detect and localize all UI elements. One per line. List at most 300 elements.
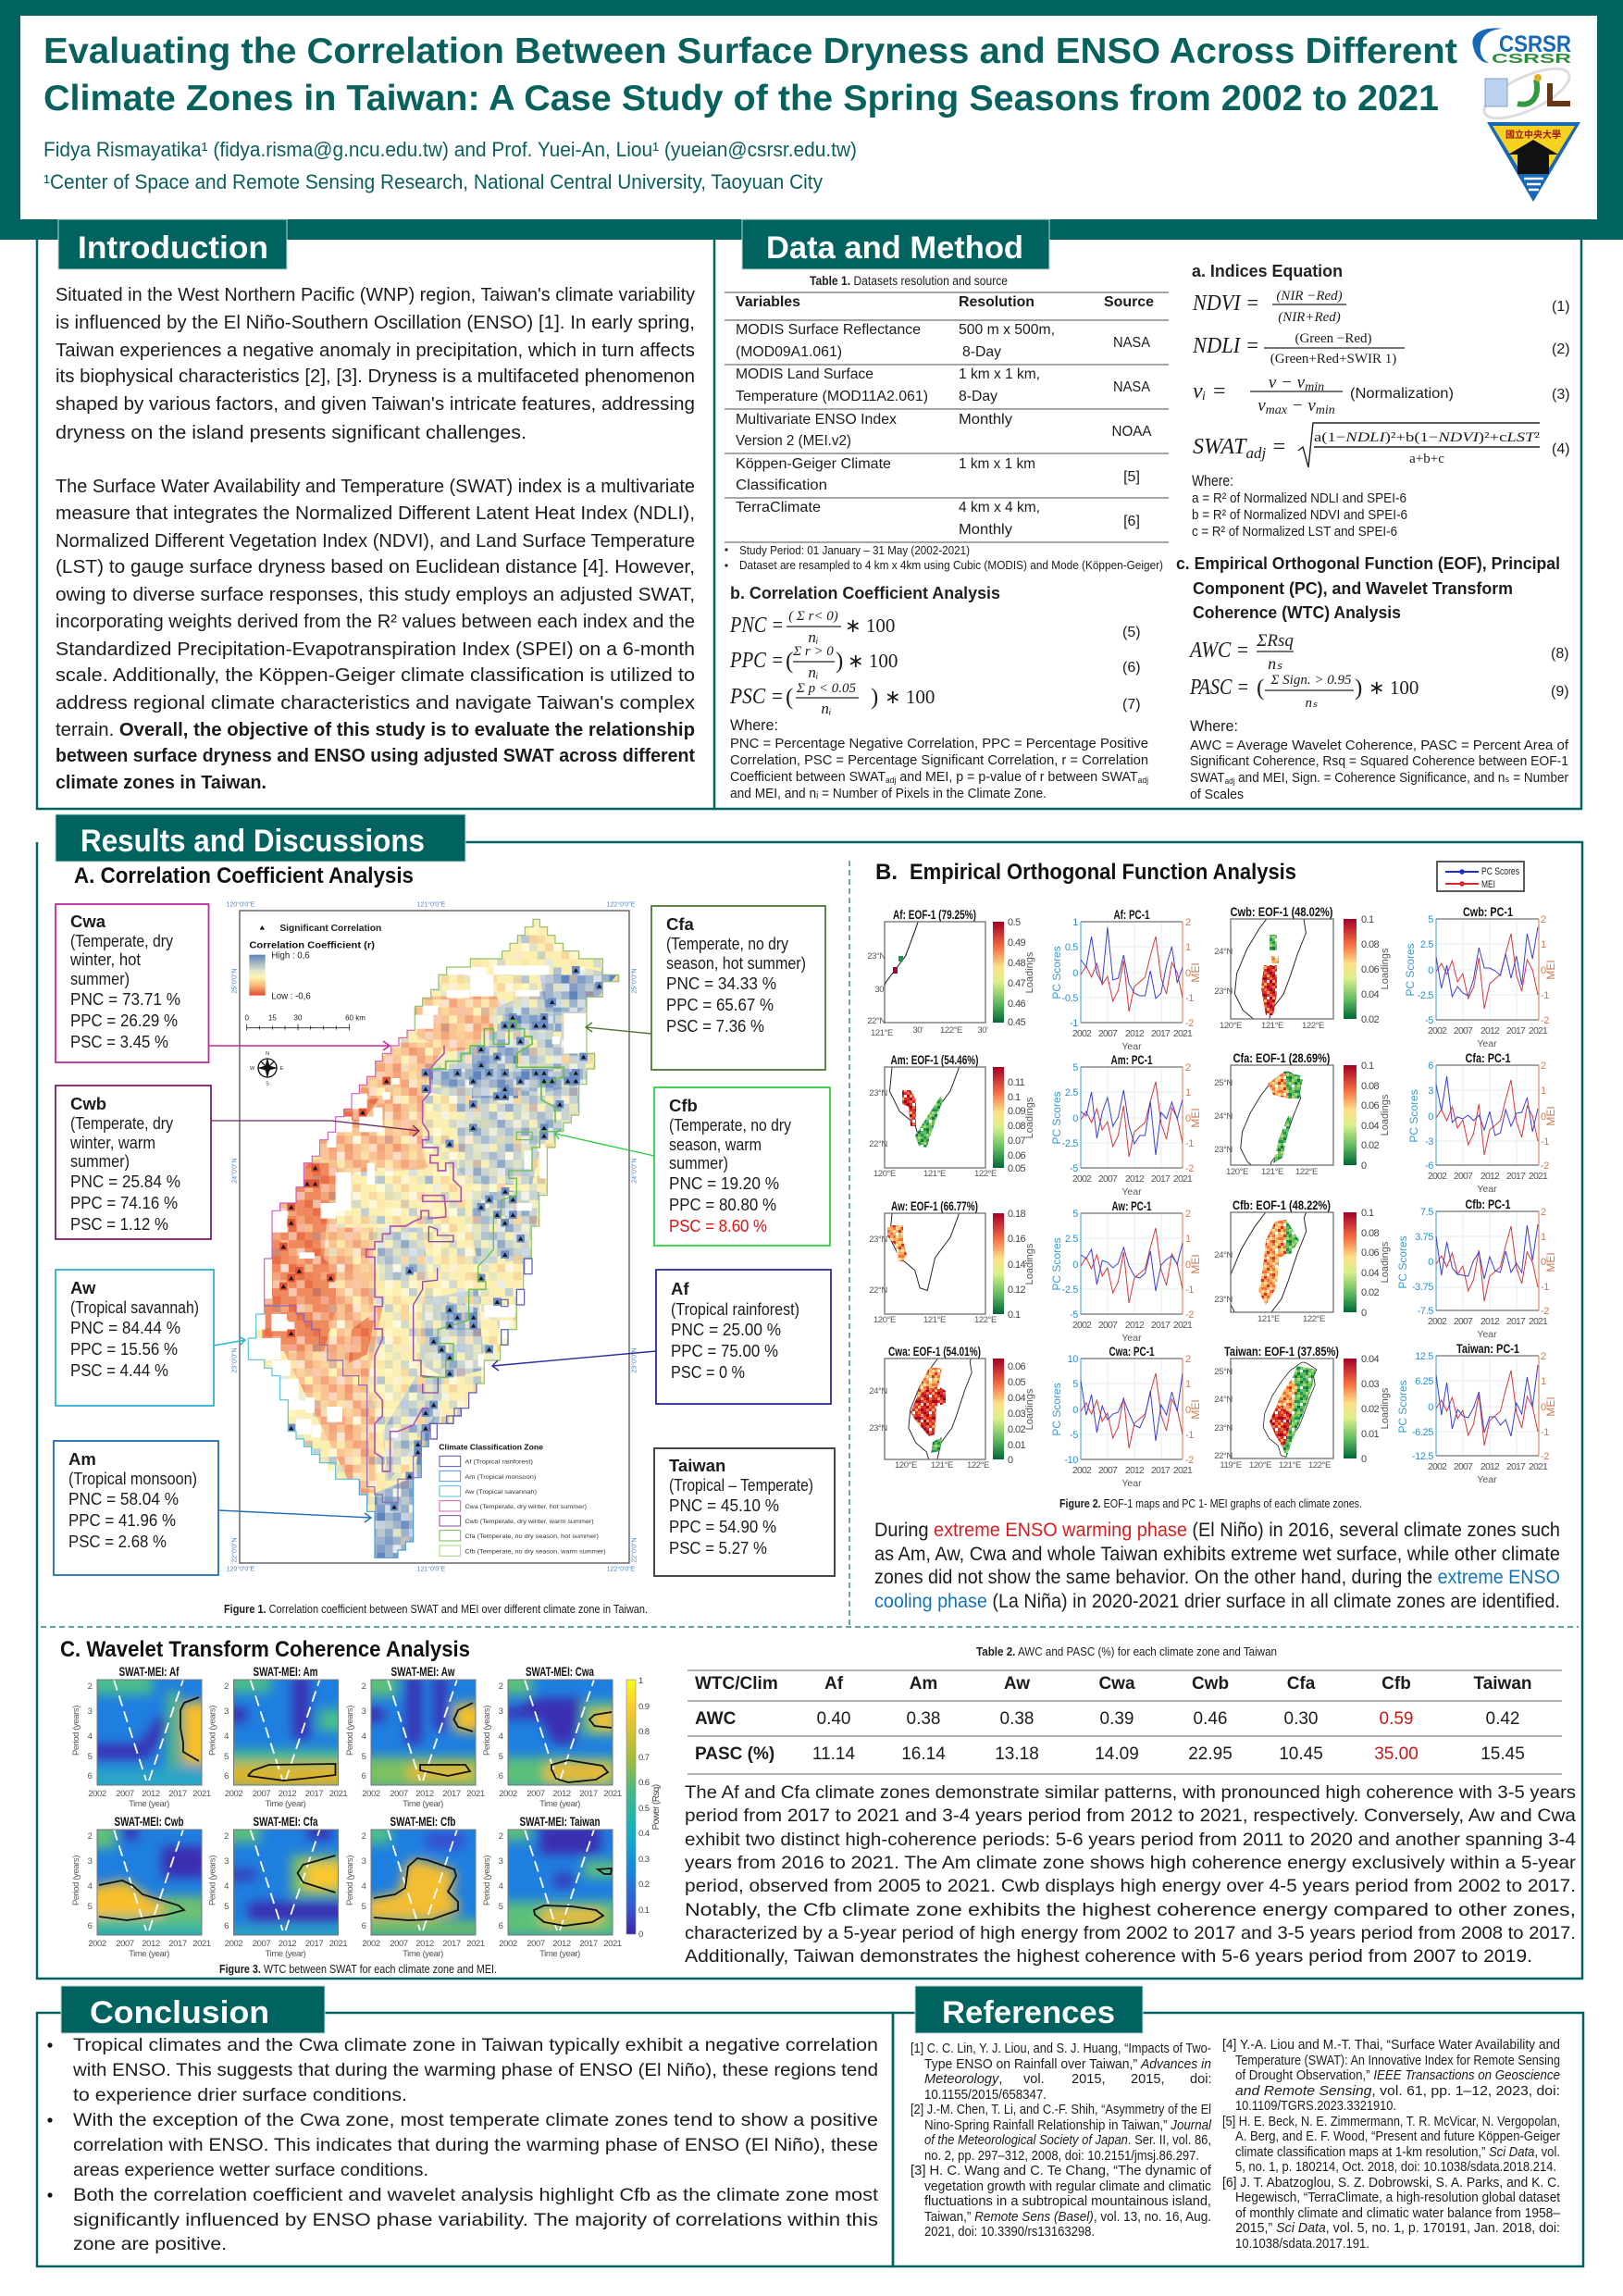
EOF map: Cwa: 0.01 <box>1008 1440 1025 1451</box>
callout: Cwb: winter, warm <box>69 1134 155 1152</box>
where block left: adj <box>886 776 896 785</box>
EOF map: Cfa: 24°N <box>1214 1111 1233 1122</box>
table 2: 0.38 <box>1000 1709 1034 1729</box>
PC chart: Taiwan: 2021 <box>1529 1461 1548 1472</box>
equation 9 <box>1189 673 1569 711</box>
PC chart: Af: 2021 <box>1173 1028 1193 1039</box>
EOF map: Taiwan <box>1214 1344 1391 1471</box>
PC chart: Am: 5 <box>1072 1062 1078 1074</box>
heading: Introduction: Introduction <box>78 230 268 266</box>
WTC panel: Aw <box>345 1664 487 1809</box>
where block left: Where: <box>730 716 778 734</box>
EOF map: Cfb: 24°N <box>1214 1250 1233 1260</box>
EOF map: Cfb: 23°N <box>1214 1295 1233 1305</box>
equation 4: (4) <box>1552 441 1570 457</box>
climate zone legend: Climate Classification Zone <box>439 1443 543 1452</box>
PC chart: Cwa: 2002 <box>1072 1465 1092 1476</box>
PC chart: Cfa: 2007 <box>1454 1171 1473 1182</box>
WTC panel: Taiwan: 4 <box>499 1881 503 1892</box>
map graticule labels: 24°0'0"N <box>230 1158 238 1184</box>
PC chart: Cwa: 2007 <box>1098 1465 1118 1476</box>
references column 1: of the Meteorological Society of Japan. Ser. II, vol. 86, <box>924 2133 1211 2148</box>
callout: Taiwan: Taiwan <box>669 1456 725 1475</box>
WTC panel: Cfa: 2002 <box>225 1939 242 1949</box>
PC chart: Taiwan: 1 <box>1541 1376 1546 1387</box>
references column 1: doi: <box>1190 2072 1212 2087</box>
PC chart: Cfa: 0 <box>1428 1111 1433 1123</box>
introduction text: The Surface Water Availability and Temperature (SWAT) index is a multivariate <box>56 476 695 497</box>
PC chart: Taiwan <box>1396 1341 1557 1485</box>
equation 3: min <box>1316 403 1335 417</box>
map graticule labels: 22°0'0"N <box>630 1537 638 1563</box>
icon: compass: S <box>266 1082 269 1087</box>
table 1: Version 2 (MEI.v2) <box>736 433 851 449</box>
equation 2: (2) <box>1552 341 1570 357</box>
PC chart: Am: PC Scores <box>1050 1091 1063 1145</box>
EOF map: Cwb: 23°N <box>1214 987 1233 997</box>
callout: Cfb: PPC = 80.80 % <box>669 1196 776 1214</box>
panel: results and discussions <box>37 802 1582 1979</box>
references column 1: fluctuations in a subtropical mountainous island, <box>924 2194 1211 2209</box>
conclusion bullets: with ENSO. This suggests that during the warming phase of ENSO (El Niño), these regions tend <box>72 2060 878 2080</box>
table 1: MODIS Land Surface <box>736 366 873 382</box>
WTC panel: Cwa: 2 <box>499 1682 503 1692</box>
ENSO paragraph <box>874 1520 1560 1612</box>
climate zone legend: Cwa (Temperate, dry winter, hot summer) <box>465 1504 587 1510</box>
callout: Af: PSC = 0 % <box>671 1363 745 1382</box>
WTC panel: Af: SWAT-MEI: Af <box>118 1664 180 1679</box>
EOF map: Af: 0.45 <box>1008 1017 1025 1028</box>
heading: Data and Method: Data and Method <box>766 230 1023 266</box>
callout: Am: PSC = 2.68 % <box>68 1533 167 1551</box>
EOF map: Af <box>825 802 1035 1038</box>
PC chart: Cwa: 1 <box>1185 1379 1191 1390</box>
callout: Cwa: PSC = 3.45 % <box>70 1033 168 1051</box>
WTC panel: Am: Time (year) <box>266 1799 306 1809</box>
PC chart: Cwa: 5 <box>1072 1379 1078 1390</box>
EOF map: Af: 0.48 <box>1008 958 1025 969</box>
climate zone legend: Aw (Tropical savannah) <box>465 1489 537 1496</box>
arrow: Cfb <box>555 1129 654 1156</box>
PC chart: Aw: -2.5 <box>1062 1285 1078 1296</box>
references column 2: [4] Y.-A. Liou and M.-T. Thai, “Surface Water Availability and <box>1222 2038 1560 2053</box>
PC chart: Cfa <box>1407 1050 1557 1195</box>
PC chart: Aw: 2017 <box>1151 1320 1171 1331</box>
WTC panel: Cfb: 2 <box>362 1831 366 1842</box>
where block left: adj <box>1138 776 1148 785</box>
conclusion bullets: With the exception of the Cwa zone, most temperate climate zones tend to show a positive <box>73 2110 878 2130</box>
EOF map: Cwb: 0.06 <box>1361 964 1379 975</box>
EOF map: Taiwan: 0.01 <box>1361 1429 1379 1440</box>
WTC panel: Taiwan: 2 <box>499 1831 503 1842</box>
logo: CSRSR <box>1472 28 1571 67</box>
conclusion bullets: correlation with ENSO. This indicates that during the warming phase of ENSO (El Niño), these <box>73 2135 878 2155</box>
WTC panel: Am: 6 <box>224 1771 229 1781</box>
callout: Cwa: winter, hot <box>69 950 141 969</box>
references column 2: [5] H. E. Beck, N. E. Zimmermann, T. R. McVicar, N. Vergopolan, <box>1222 2115 1560 2129</box>
PC chart: Cwb: 2007 <box>1454 1025 1473 1036</box>
table 2: Taiwan <box>1473 1674 1532 1694</box>
equation 4: adj <box>1245 444 1266 462</box>
callout: Cfb <box>654 1087 830 1246</box>
PC chart: Af: 2017 <box>1151 1028 1171 1039</box>
PC chart: Cfb: Cfb: PC-1 <box>1466 1197 1511 1211</box>
EOF map: Taiwan: Loadings <box>1380 1387 1391 1429</box>
ENSO paragraph: cooling phase (La Niña) in 2020-2021 drier surface in all climate zones are identified. <box>874 1591 1560 1612</box>
references column 1: 10.1155/2015/658347. <box>924 2088 1047 2103</box>
references column 2: [6] J. T. Abatzoglou, S. Z. Dobrowski, S. A. Parks, and K. C. <box>1222 2176 1560 2191</box>
PC chart: Cwa: MEI <box>1189 1399 1202 1420</box>
arrow: Cfa <box>586 1023 651 1034</box>
equation 7: PSC = <box>729 685 784 709</box>
PC chart: Taiwan: Taiwan: PC-1 <box>1456 1341 1519 1356</box>
PC chart: Cwb: 0 <box>1541 965 1546 976</box>
where block c: adj <box>1225 776 1234 786</box>
WTC colour bar: 0.4 <box>638 1829 650 1839</box>
subheading A: A. Correlation Coefficient Analysis <box>74 863 414 888</box>
PC chart: Cwa: 10 <box>1068 1354 1078 1365</box>
WTC paragraph <box>685 1782 1577 1967</box>
PC chart: Am: 2012 <box>1125 1173 1145 1185</box>
PC chart: Cfa: 1 <box>1541 1086 1546 1097</box>
equation 5: ∗ 100 <box>845 614 895 637</box>
WTC panel: Aw: 4 <box>362 1731 366 1742</box>
PC chart: Aw: -5 <box>1070 1309 1078 1321</box>
PC chart: Am: -2.5 <box>1062 1138 1078 1149</box>
equation 8 <box>1188 631 1569 673</box>
PC chart: Cwa: -5 <box>1070 1430 1078 1441</box>
introduction text: Normalized Different Vegetation Index (NDVI), and Land Surface Temperature <box>56 530 695 552</box>
EOF map: Cfa: 121°E <box>1261 1167 1283 1177</box>
WTC panel: Cwa: 2007 <box>527 1789 545 1799</box>
WTC panel: Cwa <box>482 1664 624 1809</box>
where block left: PNC = Percentage Negative Correlation, PPC = Percentage Positive <box>730 736 1148 751</box>
WTC panel: Am <box>207 1664 350 1809</box>
WTC panel: Aw: 2012 <box>415 1789 434 1799</box>
EOF map: Aw: 0.14 <box>1008 1260 1025 1271</box>
PC chart: Cfb <box>1396 1197 1557 1340</box>
PC chart: Cwa: -1 <box>1185 1430 1194 1441</box>
PC chart: Taiwan: 0 <box>1428 1402 1433 1413</box>
WTC panel: Cwa: 6 <box>499 1771 503 1781</box>
EOF map: Cwa: Loadings <box>1024 1388 1035 1430</box>
where block c: Where: <box>1190 717 1238 735</box>
equation 9: Σ Sign. > 0.95 <box>1270 673 1352 688</box>
EOF map: Am: 0.07 <box>1008 1136 1025 1147</box>
PC chart: Cwb: PC Scores <box>1404 943 1417 997</box>
equation 1: (NIR −Red) <box>1276 289 1343 304</box>
WTC panel: Cwa: Period (years) <box>482 1706 492 1756</box>
table 1: 500 m x 500m, <box>959 322 1055 338</box>
heading: Results and Discussions: Results and Discussions <box>81 824 425 859</box>
EOF map: Af: 30' <box>977 1025 988 1036</box>
EOF map: Taiwan: 25°N <box>1214 1367 1233 1377</box>
introduction text: measure that integrates the Normalized Different Latent Heat Index (NDLI), <box>56 503 695 524</box>
WTC panel: Af: 2021 <box>192 1789 211 1799</box>
WTC panel: Am: 4 <box>224 1731 229 1742</box>
callout: Cfa: (Temperate, no dry <box>666 935 788 953</box>
white no-data cells <box>248 965 587 1437</box>
PC chart: Cwa: 2021 <box>1173 1465 1193 1476</box>
EOF map: Taiwan: 23°N <box>1214 1423 1233 1433</box>
heading: Conclusion <box>61 1986 325 2033</box>
callout: Af: PPC = 75.00 % <box>671 1342 778 1360</box>
callout: Cfa: season, hot summer) <box>666 954 806 973</box>
EOF map: Cwb: 0.04 <box>1361 989 1379 1000</box>
EOF map: Aw: 0.18 <box>1008 1209 1025 1220</box>
map legend: significance and colour ramp: Correlation Coefficient (r) <box>249 940 375 950</box>
PC chart: Cwb: -2 <box>1541 1015 1549 1026</box>
WTC panel: Aw: 2 <box>362 1682 366 1692</box>
equation 3: (3) <box>1552 387 1570 403</box>
EOF map: Am: 0.06 <box>1008 1150 1025 1161</box>
callout: Cfb: Cfb <box>669 1096 698 1115</box>
equation 3: v − v <box>1269 373 1305 392</box>
equation 5: (5) <box>1122 625 1141 640</box>
table 2: 16.14 <box>901 1744 946 1764</box>
equation 6: PPC = <box>729 649 784 673</box>
PC chart: Cfb: 2021 <box>1529 1316 1548 1327</box>
PC chart: Af: -0.5 <box>1062 993 1078 1004</box>
EOF map: Cfa: Loadings <box>1380 1094 1391 1136</box>
EOF map: Cwa: 0.02 <box>1008 1424 1025 1435</box>
where block a: b = R² of Normalized NDVI and SPEI-6 <box>1192 507 1407 523</box>
WTC panel: Cfa <box>207 1814 350 1959</box>
WTC colour bar: Power (Rsq) <box>651 1784 662 1830</box>
EOF map: Af: 0.49 <box>1008 937 1025 949</box>
EOF map: Af: 0.5 <box>1008 917 1021 928</box>
EOF map: Am: Am: EOF-1 (54.46%) <box>890 1052 979 1067</box>
WTC panel: Cwa: 4 <box>499 1731 503 1742</box>
WTC panel: Aw: 2007 <box>390 1789 408 1799</box>
callout: Af <box>656 1270 831 1404</box>
map graticule labels <box>227 900 638 1572</box>
WTC panel: Af: 2017 <box>168 1789 187 1799</box>
PC chart: Am: -1 <box>1185 1138 1194 1149</box>
WTC panel: Cwa: 2021 <box>603 1789 622 1799</box>
equation 3: max <box>1266 403 1288 417</box>
scale bar: 60 km <box>345 1013 365 1022</box>
map cells <box>256 920 618 1558</box>
PC chart: Cfb: -3.75 <box>1412 1282 1433 1293</box>
equation 6: ∗ 100 <box>848 650 898 672</box>
table 2: Cwa <box>1098 1674 1135 1694</box>
callout: Cfa: PNC = 34.33 % <box>666 974 776 993</box>
callout: Cwa: Cwa <box>70 912 106 931</box>
map graticule labels: 120°0'0"E <box>227 1565 255 1572</box>
WTC panel: Cwb: 2002 <box>88 1939 106 1949</box>
EOF map: Af: 122°E <box>940 1025 962 1036</box>
authors: Fidya Rismayatika¹ (fidya.risma@g.ncu.edu.tw) and Prof. Yuei-An, Liou¹ (yueian@csrsr.edu.tw) <box>43 138 857 161</box>
EOF map: Taiwan: 0 <box>1361 1454 1367 1465</box>
EOF map: Cfb: 122°E <box>1303 1314 1325 1324</box>
title: Climate Zones in Taiwan: A Case Study of the Spring Seasons from 2002 to 2021 <box>43 79 1439 118</box>
PC chart: Cwb: 2002 <box>1428 1025 1447 1036</box>
callout: Aw: PNC = 84.44 % <box>70 1319 180 1337</box>
EOF map: Cfb: Cfb: EOF-1 (48.22%) <box>1233 1198 1331 1212</box>
EOF map: Cwb: 122°E <box>1302 1021 1324 1031</box>
WTC panel: Cfb: 2007 <box>390 1939 408 1949</box>
map legend: significance and colour ramp <box>249 924 381 1001</box>
PC chart: Af: -2 <box>1185 1018 1194 1029</box>
PC chart: Af: Year <box>1121 1041 1142 1052</box>
WTC panel: Cfb: 3 <box>362 1856 366 1867</box>
references column 1: Type ENSO on Rainfall over Taiwan,” Advances in <box>924 2057 1211 2072</box>
EOF map: Am: 23°N <box>869 1088 887 1098</box>
callout: Cwb: PPC = 74.16 % <box>70 1194 178 1212</box>
WTC panel: Aw: 2021 <box>466 1789 485 1799</box>
PC chart: Cwb: -2.5 <box>1418 990 1433 1001</box>
PC chart: Af: 1 <box>1185 942 1191 953</box>
callout: Cwb: Cwb <box>70 1094 106 1113</box>
EOF map: Af: 30' <box>912 1025 923 1036</box>
PC chart: Aw: 2021 <box>1173 1320 1193 1331</box>
PC chart: Cfb: -2 <box>1541 1306 1549 1317</box>
title <box>43 31 1457 118</box>
introduction text: Standardized Precipitation-Evapotranspiration Index (SPEI) on a 6-month <box>56 639 695 660</box>
references column 2: 5, no. 1, p. 180214, Oct. 2018, doi: 10.1038/sdata.2018.214. <box>1235 2160 1556 2175</box>
WTC panel: Am: 2007 <box>253 1789 270 1799</box>
WTC paragraph: exhibit two distinct high-coherence periods: 5-6 years period from 2011 to 2020 and another spanning 3-4 <box>685 1830 1576 1850</box>
conclusion bullets: Tropical climates and the Cwa climate zone in Taiwan typically exhibit a negative correlation <box>73 2035 878 2055</box>
chart legend: MEI <box>1481 879 1495 890</box>
EOF map: Aw <box>869 1122 1035 1325</box>
conclusion bullets <box>47 2035 879 2254</box>
callout: Cfa <box>651 906 825 1070</box>
equation 3: min <box>1305 380 1324 394</box>
EOF map: Af: 0.46 <box>1008 999 1025 1010</box>
equation 2: (Green −Red) <box>1295 331 1372 346</box>
panel: conclusion <box>37 1986 893 2266</box>
PC chart: Af <box>1050 907 1202 1052</box>
section c heading: c. Empirical Orthogonal Function (EOF), Principal <box>1176 554 1560 573</box>
PC chart: Af: 0 <box>1072 968 1078 979</box>
title: Evaluating the Correlation Between Surface Dryness and ENSO Across Different <box>43 31 1457 71</box>
references column 2: 10.1109/TGRS.2023.3321910. <box>1235 2099 1396 2114</box>
WTC panel: Taiwan: 6 <box>499 1921 503 1931</box>
WTC paragraph: characterized by a 5-year period of high energy from 2002 to 2017 and 3-5 years period from 2008 to 2017. <box>685 1923 1576 1943</box>
PC chart: Cwa: 0 <box>1072 1405 1078 1416</box>
equation 6: ) <box>836 649 843 674</box>
EOF map: Taiwan: 0.02 <box>1361 1404 1379 1415</box>
EOF map: Cfa: 0.02 <box>1361 1140 1379 1151</box>
WTC panel: Cwb: 2021 <box>192 1939 211 1949</box>
EOF map: Cfb: Loadings <box>1380 1241 1391 1283</box>
PC chart: Am: 0 <box>1185 1113 1191 1124</box>
PC chart: Taiwan: 2017 <box>1506 1461 1526 1472</box>
conclusion bullets: to experience drier surface conditions. <box>73 2085 407 2105</box>
PC chart: Am: 2007 <box>1098 1173 1118 1185</box>
PC chart: Cwb: MEI <box>1544 960 1557 980</box>
references column 1: Taiwan,” Remote Sens (Basel), vol. 13, no. 16, Aug. <box>924 2210 1211 2225</box>
equation 9: ( <box>1257 676 1264 701</box>
EOF map: Am: 0.05 <box>1008 1163 1025 1174</box>
EOF map: Aw: 0.12 <box>1008 1285 1025 1296</box>
callout: Taiwan: PSC = 5.27 % <box>669 1539 767 1558</box>
PC chart: Cfb: MEI <box>1544 1252 1557 1272</box>
arrow: Cwb <box>211 1121 419 1136</box>
EOF map: Cwa: 0.03 <box>1008 1409 1025 1420</box>
WTC panel: Taiwan: 2012 <box>552 1939 571 1949</box>
EOF map: Af: 30' <box>874 985 886 995</box>
equation 6: (6) <box>1122 660 1141 676</box>
callout: Aw <box>56 1270 214 1406</box>
WTC panel: Am: 2 <box>224 1682 229 1692</box>
chart legend: PC Scores <box>1481 866 1519 877</box>
PC chart: Cfb: 0 <box>1541 1257 1546 1268</box>
equation 5 <box>729 609 1141 646</box>
conclusion bullets: areas experience wetter surface conditions. <box>73 2160 428 2180</box>
arrow: Af <box>492 1351 656 1371</box>
PC chart: Af: MEI <box>1189 962 1202 983</box>
heading: Results and Discussions <box>56 814 465 862</box>
callout: Af: PNC = 25.00 % <box>671 1321 781 1339</box>
map legend: significance and colour ramp: High : 0,6 <box>271 950 310 961</box>
climate zone legend: Cfa (Temperate, no dry season, hot summer) <box>465 1533 599 1540</box>
scale bar: 30 <box>294 1013 303 1022</box>
EOF map: Cfa: 23°N <box>1214 1145 1233 1155</box>
references column 2: of Drought Observation,” IEEE Transactions on Geoscience <box>1235 2068 1560 2083</box>
table 2: 35.00 <box>1374 1744 1419 1764</box>
table 2: 0.42 <box>1486 1709 1519 1729</box>
WTC panel: Cfb <box>345 1814 487 1959</box>
subheading B: Empirical Orthogonal Function Analysis <box>910 860 1296 885</box>
PC chart: Cfa: -2 <box>1541 1160 1549 1172</box>
callout: Cfb: (Temperate, no dry <box>669 1116 791 1135</box>
PC chart: Af: 1 <box>1072 917 1078 928</box>
PC chart: Cfb: PC Scores <box>1396 1235 1409 1289</box>
callout: Cwa: summer) <box>70 970 130 988</box>
PC chart: Taiwan: Year <box>1477 1474 1497 1485</box>
WTC paragraph: Additionally, Taiwan demonstrates the highest coherence with 5-6 years period from 2007 to 2019. <box>685 1946 1532 1967</box>
scale bar: 15 <box>268 1013 277 1022</box>
equation 3: (Normalization) <box>1350 386 1454 402</box>
where block left: Correlation, PSC = Percentage Significant Correlation, r = Correlation <box>730 752 1148 768</box>
ENSO paragraph: as Am, Aw, Cwa and whole Taiwan exhibits extreme wet surface, while other climate <box>874 1544 1560 1565</box>
PC chart: Cwb: 1 <box>1541 939 1546 950</box>
EOF map: Cwa: 0.05 <box>1008 1377 1025 1388</box>
EOF map: Af: 23°N <box>867 951 886 962</box>
WTC panel: Cfa: 2012 <box>279 1939 296 1949</box>
references column 1: vegetation growth with regular climate and climatic <box>924 2179 1211 2194</box>
WTC panel: Cwb: Time (year) <box>129 1949 169 1959</box>
PC chart: Aw: 2.5 <box>1065 1234 1078 1245</box>
PC chart: Am: 0 <box>1072 1113 1078 1124</box>
table 2: Af <box>824 1674 844 1694</box>
PC chart: Cwb: 2012 <box>1481 1025 1500 1036</box>
WTC panel: Cfa: 3 <box>224 1856 229 1867</box>
PC chart: Cwb: Year <box>1477 1038 1497 1049</box>
PC chart: Cwa: 0 <box>1185 1405 1191 1416</box>
EOF map: Aw: 120°E <box>873 1315 896 1325</box>
map graticule labels: 120°0'0"E <box>227 900 255 908</box>
callout: Af: (Tropical rainforest) <box>671 1300 799 1319</box>
equation 9: ∗ 100 <box>1369 676 1419 699</box>
conclusion bullets: significantly influenced by ENSO phase variability. The majority of correlations within this <box>73 2210 878 2230</box>
introduction text: climate zones in Taiwan. <box>56 772 266 793</box>
PC chart: Am: -5 <box>1070 1163 1078 1174</box>
WTC panel: Cfa: 6 <box>224 1921 229 1931</box>
WTC colour bar: 0.8 <box>638 1727 650 1737</box>
PC chart: Cfa: -6 <box>1425 1160 1433 1172</box>
EOF map: Cfa: 0.1 <box>1361 1061 1374 1072</box>
PC chart: Cfb: 2012 <box>1481 1316 1500 1327</box>
EOF map: Cwb: 0.1 <box>1361 914 1374 925</box>
table 2: 10.45 <box>1279 1744 1323 1764</box>
PC chart: Cwb: 0 <box>1428 965 1433 976</box>
PC chart: Taiwan: 2002 <box>1428 1461 1447 1472</box>
logo: lab <box>1478 59 1576 128</box>
